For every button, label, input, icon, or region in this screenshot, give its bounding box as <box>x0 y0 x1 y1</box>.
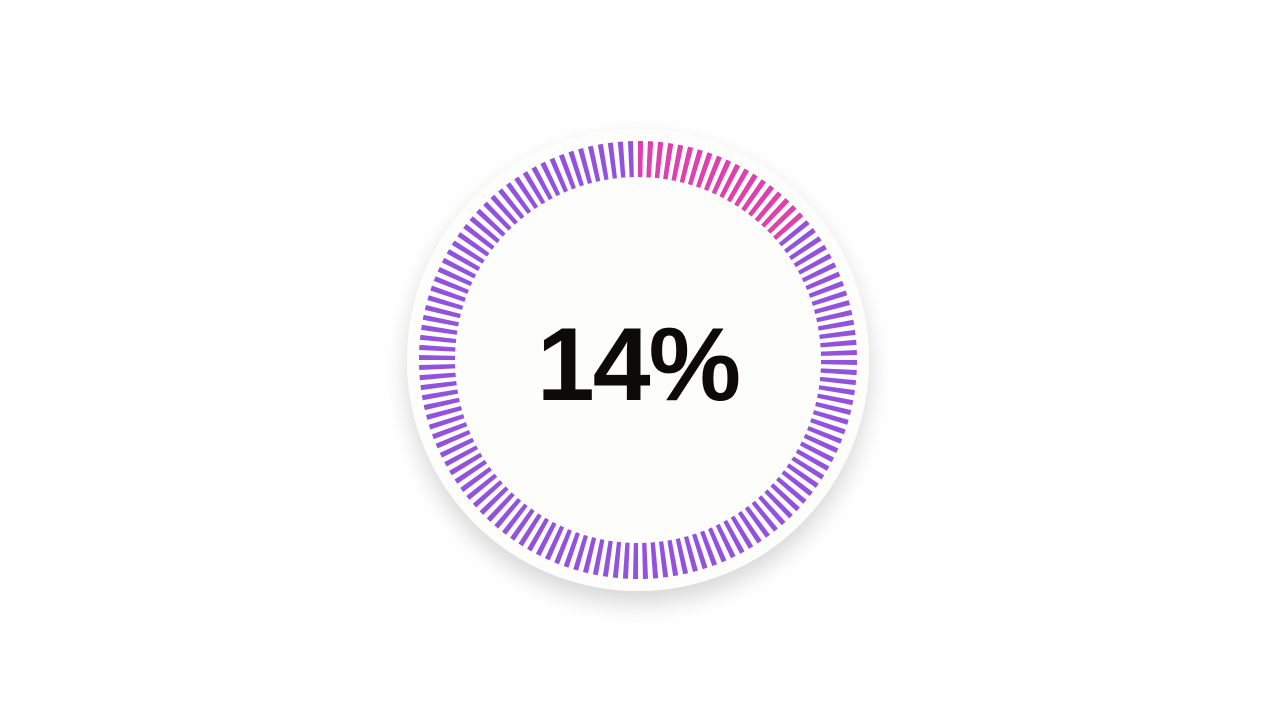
pink progress ticks <box>638 159 793 232</box>
disc background <box>407 129 869 591</box>
tick ring <box>437 159 839 561</box>
percentage label: 14% <box>537 307 739 423</box>
purple ticks <box>437 159 839 561</box>
